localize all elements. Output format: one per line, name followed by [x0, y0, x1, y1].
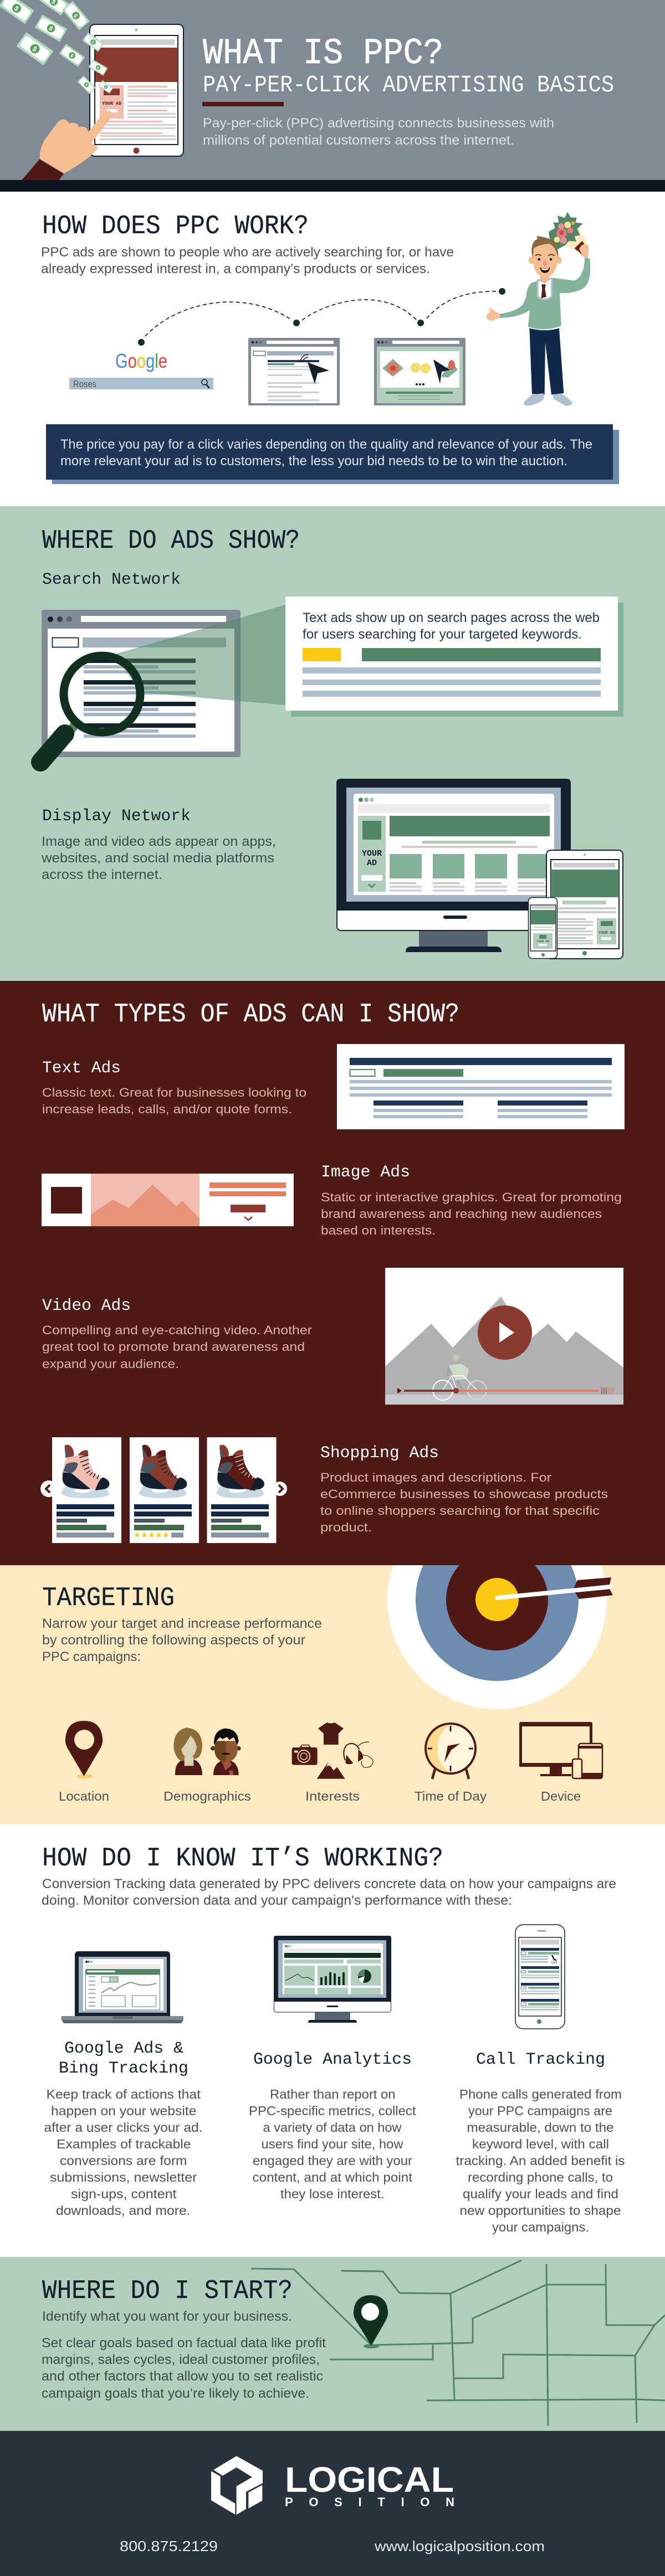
- heading: TARGETING: [42, 1583, 175, 1613]
- logo wordmark: POSITION: [285, 2495, 454, 2509]
- icon: pointing hand: [22, 111, 112, 180]
- text block: engaged they are with your: [253, 2153, 412, 2168]
- label: device: Device: [541, 1789, 581, 1803]
- text block: image ads: based on interests.: [321, 1223, 436, 1237]
- icon: desktop monitor: [336, 779, 571, 952]
- text block: sign-ups, content: [71, 2187, 177, 2201]
- text block: [44, 2087, 203, 2218]
- text block: [42, 1876, 616, 1908]
- icon: devices: [519, 1722, 602, 1778]
- icon: clock: [426, 1724, 475, 1779]
- title: WHAT IS PPC?: [203, 33, 443, 74]
- icon: demographics people: [173, 1727, 241, 1775]
- icon: phone: YOUR AD: [536, 939, 550, 943]
- icon: falling money: [0, 0, 113, 94]
- heading: HOW DO I KNOW IT’S WORKING?: [42, 1844, 443, 1874]
- text block: recording phone calls, to: [468, 2170, 613, 2184]
- panel: where do ads show: [0, 506, 665, 981]
- icon: interests: [292, 1723, 373, 1779]
- heading: WHERE DO I START?: [42, 2276, 293, 2306]
- panel: what types of ads: [0, 981, 665, 1565]
- map lines: [251, 2260, 665, 2426]
- column: google analytics: [249, 1936, 416, 2201]
- subheading: display network: Display Network: [42, 807, 191, 826]
- text block: conversions are form: [60, 2153, 187, 2168]
- callout: price: The price you pay for a click varies depending on the quality and relevance of your ads. The: [60, 437, 592, 452]
- subheading: Google Ads &: [64, 2039, 183, 2058]
- text block: PPC ads are shown to people who are actively searching for, or have: [41, 245, 454, 260]
- text block: [249, 2087, 416, 2201]
- column: call tracking: [456, 1925, 625, 2234]
- intro text: Pay-per-click (PPC) advertising connects businesses with: [203, 116, 554, 131]
- panel: header: [0, 0, 665, 192]
- label: time of day: Time of Day: [415, 1789, 487, 1803]
- icon: phone with call ads: Call: [551, 1961, 557, 1965]
- icon: falling money: $: [48, 25, 54, 33]
- heading: WHAT TYPES OF ADS CAN I SHOW?: [42, 1000, 459, 1030]
- product card 3: [207, 1437, 276, 1543]
- icon: phone: [529, 897, 557, 958]
- text block: Identify what you want for your business.: [42, 2309, 292, 2324]
- heading: WHERE DO ADS SHOW?: [42, 526, 300, 556]
- text block: shopping ads: to online shoppers searching for that specific: [320, 1504, 600, 1518]
- column: google ads and bing tracking: [44, 1951, 203, 2218]
- text block: video ads: expand your audience.: [42, 1357, 179, 1371]
- text block: image ads: [321, 1190, 622, 1237]
- text block: Conversion Tracking data generated by PPC delivers concrete data on how your campaigns are: [42, 1876, 616, 1891]
- icon: phone with call ads: [515, 1925, 565, 2029]
- text block: keyword level, with call: [472, 2137, 609, 2151]
- icon: falling money: $: [31, 44, 39, 54]
- product card 1: [52, 1437, 121, 1543]
- text block: PPC-specific metrics, collect: [249, 2104, 416, 2118]
- website: www.logicalposition.com: [374, 2538, 545, 2554]
- text block: Examples of trackable: [57, 2137, 191, 2151]
- text block: [42, 2309, 326, 2401]
- text block: campaign goals that you’re likely to achieve.: [42, 2386, 309, 2401]
- subheading: shopping ads: Shopping Ads: [320, 1444, 439, 1463]
- text block: and other factors that allow you to set realistic: [42, 2369, 323, 2384]
- text block: Set clear goals based on factual data like profit: [42, 2336, 326, 2351]
- text block: happen on your website: [51, 2104, 196, 2118]
- flower shop browser: [374, 338, 466, 405]
- google search box: Google: [115, 349, 167, 372]
- icon: falling money: $: [84, 83, 88, 88]
- text block: by controlling the following aspects of your: [42, 1633, 305, 1648]
- icon: analytics monitor: [274, 1936, 391, 2023]
- text block: [42, 1616, 322, 1664]
- phone number: 800.875.2129: [120, 2538, 218, 2554]
- text block: measurable, down to the: [467, 2120, 614, 2135]
- text block: display network: websites, and social media platforms: [41, 851, 274, 866]
- carousel arrows: [40, 1480, 287, 1497]
- panel: footer: [0, 2431, 665, 2576]
- icon: desktop monitor: YOUR: [362, 849, 382, 858]
- subheading: [59, 2039, 188, 2078]
- icon: falling money: $: [72, 12, 79, 19]
- callout: text ads: Text ads show up on search pages across the web: [303, 610, 600, 625]
- icon: falling money: $: [90, 39, 96, 45]
- logo mark: [211, 2456, 263, 2515]
- product card 2: ★★★★★: [134, 1531, 170, 1540]
- text block: shopping ads: Product images and descriptions. For: [320, 1470, 552, 1484]
- icon: location pin: [65, 1721, 103, 1779]
- intro text: millions of potential customers across the internet.: [203, 133, 514, 148]
- text block: PPC campaigns:: [42, 1649, 141, 1664]
- text block: display network: Image and video ads appear on apps,: [42, 834, 276, 849]
- text block: qualify your leads and find: [463, 2187, 618, 2201]
- text block: a variety of data on how: [263, 2120, 402, 2135]
- icon: laptop: [61, 1951, 183, 2023]
- text block: text ads: [42, 1086, 306, 1116]
- subheading: video ads: Video Ads: [42, 1297, 131, 1315]
- text block: image ads: brand awareness and reaching new audiences: [321, 1207, 602, 1221]
- panel: targeting: [0, 1565, 665, 1824]
- label: demographics: Demographics: [163, 1789, 251, 1803]
- text block: after a user clicks your ad.: [44, 2120, 203, 2135]
- text block: [456, 2087, 625, 2234]
- logo wordmark: LOGICAL: [285, 2460, 454, 2500]
- panel: how do I know it's working: [0, 1824, 665, 2257]
- text block: submissions, newsletter: [50, 2170, 197, 2184]
- callout: text ads: [285, 597, 623, 717]
- subheading: Google Analytics: [253, 2050, 412, 2069]
- icon: map pin: [354, 2295, 388, 2348]
- icon: tablet: YOUR AD: [598, 931, 615, 935]
- icon: falling money: $: [104, 85, 107, 89]
- text block: video ads: [42, 1323, 313, 1371]
- text block: content, and at which point: [253, 2170, 413, 2184]
- subheading: image ads: Image Ads: [321, 1163, 410, 1182]
- text block: shopping ads: eCommerce businesses to showcase products: [320, 1487, 608, 1501]
- google search box: [69, 349, 213, 389]
- icon: falling money: $: [13, 4, 21, 13]
- icon: target with arrow: [387, 1565, 613, 1709]
- text block: video ads: great tool to promote brand awareness and: [42, 1340, 305, 1354]
- panel: where do I start: [0, 2257, 665, 2431]
- icon: tablet: [546, 850, 623, 959]
- illustration: image ad: [42, 1174, 294, 1226]
- illustration: video player: [385, 1268, 623, 1405]
- label: location: Location: [59, 1789, 109, 1803]
- heading: HOW DOES PPC WORK?: [42, 212, 309, 241]
- text block: Keep track of actions that: [47, 2087, 201, 2101]
- text block: already expressed interest in, a company’s products or services.: [41, 261, 430, 276]
- text block: image ads: Static or interactive graphics. Great for promoting: [321, 1190, 622, 1204]
- text block: downloads, and more.: [56, 2203, 191, 2218]
- text block: margins, sales cycles, ideal customer profiles,: [42, 2352, 320, 2367]
- text block: your campaigns.: [492, 2220, 589, 2234]
- text block: they lose interest.: [280, 2187, 385, 2201]
- text block: [41, 245, 454, 276]
- text block: Narrow your target and increase performance: [42, 1616, 322, 1631]
- google search box: Roses: [73, 379, 96, 389]
- text block: shopping ads: [320, 1470, 608, 1534]
- callout: text ads: for users searching for your targeted keywords.: [303, 627, 582, 642]
- intro text: [203, 116, 554, 148]
- illustration: shopping carousel: [40, 1437, 287, 1543]
- callout: price: [46, 424, 619, 484]
- text block: text ads: increase leads, calls, and/or quote forms.: [42, 1102, 292, 1116]
- illustration: text ad: [337, 1044, 625, 1129]
- label: interests: Interests: [305, 1789, 360, 1803]
- illustration: man holding bouquet: [486, 212, 590, 406]
- text block: users find your site, how: [262, 2137, 403, 2151]
- icon: falling money: $: [96, 66, 100, 70]
- text block: display network: across the internet.: [42, 867, 162, 882]
- panel: how does PPC work: [0, 192, 665, 506]
- magnifier beam: [115, 605, 285, 705]
- subheading: Call Tracking: [476, 2050, 605, 2069]
- product card 2: [130, 1437, 199, 1543]
- text block: your PPC campaigns are: [468, 2104, 612, 2118]
- icon: desktop monitor: AD: [367, 858, 377, 868]
- text block: shopping ads: product.: [320, 1520, 372, 1534]
- dashed journey path: [138, 288, 505, 346]
- search results browser: [248, 338, 340, 405]
- search browser illustration: [42, 610, 241, 757]
- icon: falling money: $: [69, 53, 75, 59]
- subheading: Bing Tracking: [59, 2059, 188, 2078]
- text block: new opportunities to shape: [460, 2203, 621, 2218]
- callout: price: more relevant your ad is to customers, the less your bid needs to be to win the auction.: [60, 454, 567, 469]
- icon: tablet with ad: [90, 24, 183, 156]
- text block: Phone calls generated from: [459, 2087, 622, 2101]
- icon: tablet with ad: YOUR AD: [102, 101, 121, 106]
- text block: tracking. An added benefit is: [456, 2153, 625, 2168]
- text block: video ads: Compelling and eye-catching video. Another: [42, 1323, 313, 1337]
- subtitle: PAY-PER-CLICK ADVERTISING BASICS: [203, 71, 614, 99]
- text block: Rather than report on: [270, 2087, 396, 2101]
- icon: magnifying glass: [40, 656, 140, 762]
- text block: doing. Monitor conversion data and your campaign's performance with these:: [42, 1893, 512, 1908]
- subheading: search network: Search Network: [42, 570, 181, 589]
- text block: display network: [41, 834, 276, 882]
- text block: text ads: Classic text. Great for businesses looking to: [42, 1086, 306, 1099]
- subheading: text ads: Text Ads: [42, 1059, 121, 1078]
